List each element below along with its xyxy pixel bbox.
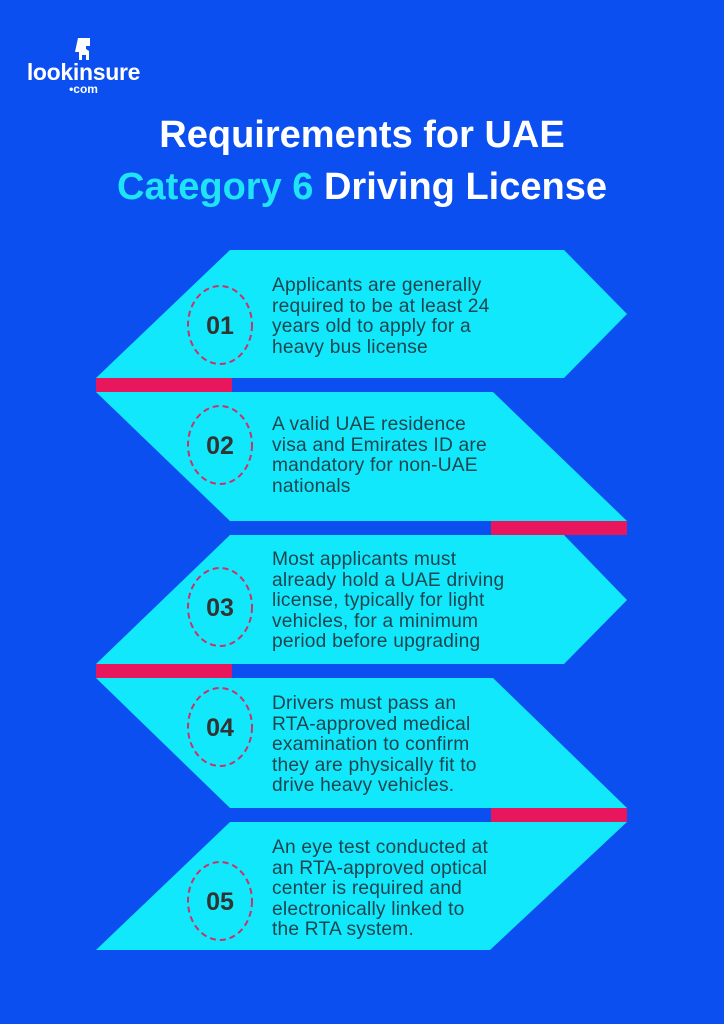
text: item 3: Most applicants must [272, 549, 456, 570]
text: item 2: visa and Emirates ID are [272, 434, 487, 456]
text: item 3 [272, 549, 504, 652]
panels graphic: 05 [206, 888, 234, 916]
text: item 5: electronically linked to [272, 898, 465, 920]
panels graphic: 03 [206, 594, 234, 622]
text: item 1: heavy bus license [272, 336, 428, 358]
text: item 3: vehicles, for a minimum [272, 610, 478, 632]
logo: lookinsure [27, 59, 140, 85]
text: item 5: an RTA-approved optical [272, 858, 487, 878]
text: item 2: nationals [272, 476, 351, 496]
text: item 1 [272, 275, 489, 358]
panels graphic: 02 [206, 432, 234, 460]
title: Requirements for UAE [159, 114, 565, 156]
text: item 3: license, typically for light [272, 590, 484, 611]
text: item 5: the RTA system. [272, 919, 414, 940]
panels graphic: 04 [206, 714, 234, 742]
text: item 1: Applicants are generally [272, 275, 482, 296]
text: item 2: A valid UAE residence [272, 414, 466, 435]
text: item 2 [272, 414, 487, 496]
title: Category 6 Driving License [117, 166, 607, 208]
logo [27, 38, 140, 96]
text: item 4: RTA-approved medical [272, 714, 470, 734]
text: item 4: Drivers must pass an [272, 693, 456, 714]
text: item 3: already hold a UAE driving [272, 570, 504, 590]
text: item 1: required to be at least 24 [272, 296, 489, 316]
text: item 4: drive heavy vehicles. [272, 775, 454, 796]
panels graphic: 01 [206, 312, 234, 340]
text: item 5 [272, 837, 488, 940]
text: item 3: period before upgrading [272, 631, 480, 652]
icon: dino [75, 38, 90, 60]
text: item 4: they are physically fit to [272, 754, 477, 776]
text: item 4 [272, 693, 477, 796]
logo: •com [69, 82, 98, 96]
text: item 4: examination to confirm [272, 734, 469, 755]
title [117, 114, 607, 208]
text: item 5: center is required and [272, 878, 462, 899]
text: item 5: An eye test conducted at [272, 837, 488, 858]
text: item 2: mandatory for non-UAE [272, 455, 478, 476]
text: item 1: years old to apply for a [272, 316, 471, 337]
